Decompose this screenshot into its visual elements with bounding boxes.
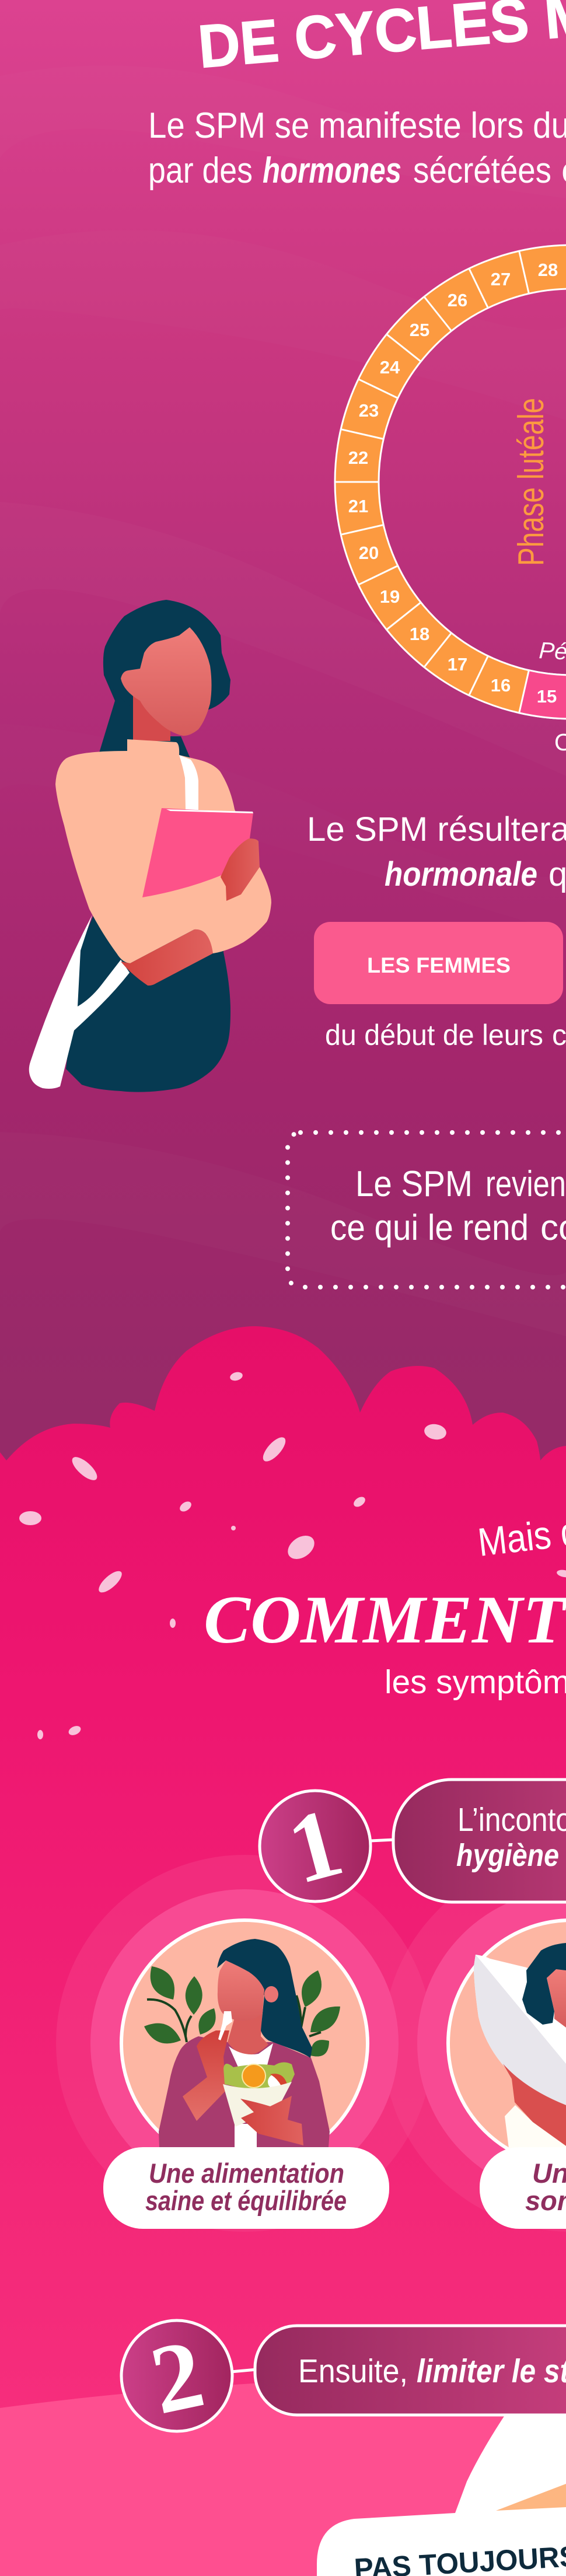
day numbers: 20 [359, 543, 379, 563]
illustration: woman with book [29, 600, 271, 1092]
day numbers: 17 [448, 654, 467, 674]
hand on book [221, 838, 260, 901]
hair [522, 1943, 566, 2025]
day numbers: 16 [491, 675, 511, 695]
luteal phase days [335, 245, 566, 719]
ovulation day [519, 670, 566, 719]
connector [231, 2369, 257, 2372]
subheading: les symptôm [385, 1663, 566, 1701]
day numbers: 23 [359, 400, 379, 421]
portrait circle [448, 1920, 566, 2166]
neck [133, 694, 170, 741]
ear [264, 1986, 278, 2002]
leaves [144, 1966, 340, 2057]
pillow [474, 1955, 566, 2105]
salad [223, 2062, 295, 2092]
pill text [298, 2353, 566, 2390]
book [142, 808, 253, 897]
bag strap [179, 755, 198, 810]
intro text: sécrétées [413, 151, 551, 191]
hair [103, 600, 230, 715]
number badge [121, 2319, 232, 2435]
day numbers [348, 260, 558, 707]
paper cone [223, 2082, 292, 2127]
day numbers: 28 [538, 260, 558, 280]
day numbers: 19 [380, 586, 400, 607]
dotted callout [288, 1133, 566, 1287]
neck [228, 2010, 268, 2055]
day numbers: 22 [348, 448, 368, 468]
jacket [159, 2036, 330, 2147]
heading: comment: COMMENT [204, 1582, 566, 1658]
arm [503, 2064, 566, 2146]
explanation text: hormonale [385, 855, 537, 893]
portrait circle [121, 1920, 368, 2166]
holding hand [240, 2096, 303, 2145]
day numbers: 15 [537, 686, 557, 707]
button: les femmes [314, 922, 563, 1004]
lower pink hill [0, 2378, 566, 2576]
cycle ring chart [335, 245, 566, 756]
dotted callout: Le SPM [355, 1164, 473, 1204]
fork [218, 2011, 232, 2040]
face [218, 1960, 264, 2021]
page background [0, 0, 566, 1575]
label: healthy eating: saine et équilibrée [145, 2185, 347, 2216]
forearm [121, 929, 213, 985]
label: healthy eating [103, 2147, 389, 2229]
day numbers: 24 [380, 357, 400, 378]
day numbers: 21 [348, 496, 368, 516]
day numbers: 27 [491, 269, 511, 289]
falling petals [19, 1371, 566, 1739]
white card [317, 2413, 566, 2576]
explanation text: Le SPM résultera [307, 810, 566, 848]
illustration: healthy eating [121, 1920, 368, 2166]
background waves [0, 65, 566, 1336]
dotted callout: ce qui le rend [330, 1208, 529, 1248]
torso and arm [55, 739, 271, 963]
pill text [456, 1801, 566, 1873]
step 1 [260, 1780, 566, 1905]
book pages [166, 809, 253, 813]
stems [147, 1995, 321, 2042]
lower shirt [235, 2124, 257, 2148]
pillow shade [474, 1955, 566, 2105]
number badge [260, 1787, 371, 1905]
bag [29, 915, 130, 1089]
number badge: 1 [277, 1787, 353, 1905]
illustration: sleep [448, 1920, 566, 2166]
intro text [148, 106, 566, 191]
phase label: Phase lutéale [511, 398, 551, 566]
button: les femmes: LES FEMMES [367, 953, 511, 977]
day numbers: 25 [410, 320, 429, 340]
peach shape [496, 2484, 566, 2511]
intro text: hormones [263, 151, 401, 191]
long hair [99, 675, 191, 760]
shirt [229, 2043, 273, 2070]
day numbers: 18 [410, 624, 429, 644]
hair [217, 1939, 312, 2058]
label: healthy eating: Une alimentation [149, 2158, 344, 2189]
day numbers: 26 [448, 290, 467, 310]
day dividers [335, 251, 529, 695]
dress [66, 915, 230, 1092]
intro text: par des [148, 151, 253, 191]
explanation text [307, 810, 566, 893]
pill text: Ensuite, [298, 2353, 408, 2390]
label: sleep [480, 2147, 566, 2229]
face [547, 1969, 566, 2028]
connector [370, 1840, 394, 1841]
shirt [505, 2105, 566, 2159]
circle halos [56, 1855, 566, 2232]
caption under button: du début de leurs [325, 1019, 543, 1051]
pill [255, 2326, 566, 2415]
face [121, 627, 211, 736]
pill [393, 1780, 566, 1902]
pink cloud section [0, 1326, 566, 2576]
step 2 [121, 2319, 566, 2435]
raising arm [183, 2030, 229, 2121]
number badge: 2 [142, 2319, 212, 2435]
